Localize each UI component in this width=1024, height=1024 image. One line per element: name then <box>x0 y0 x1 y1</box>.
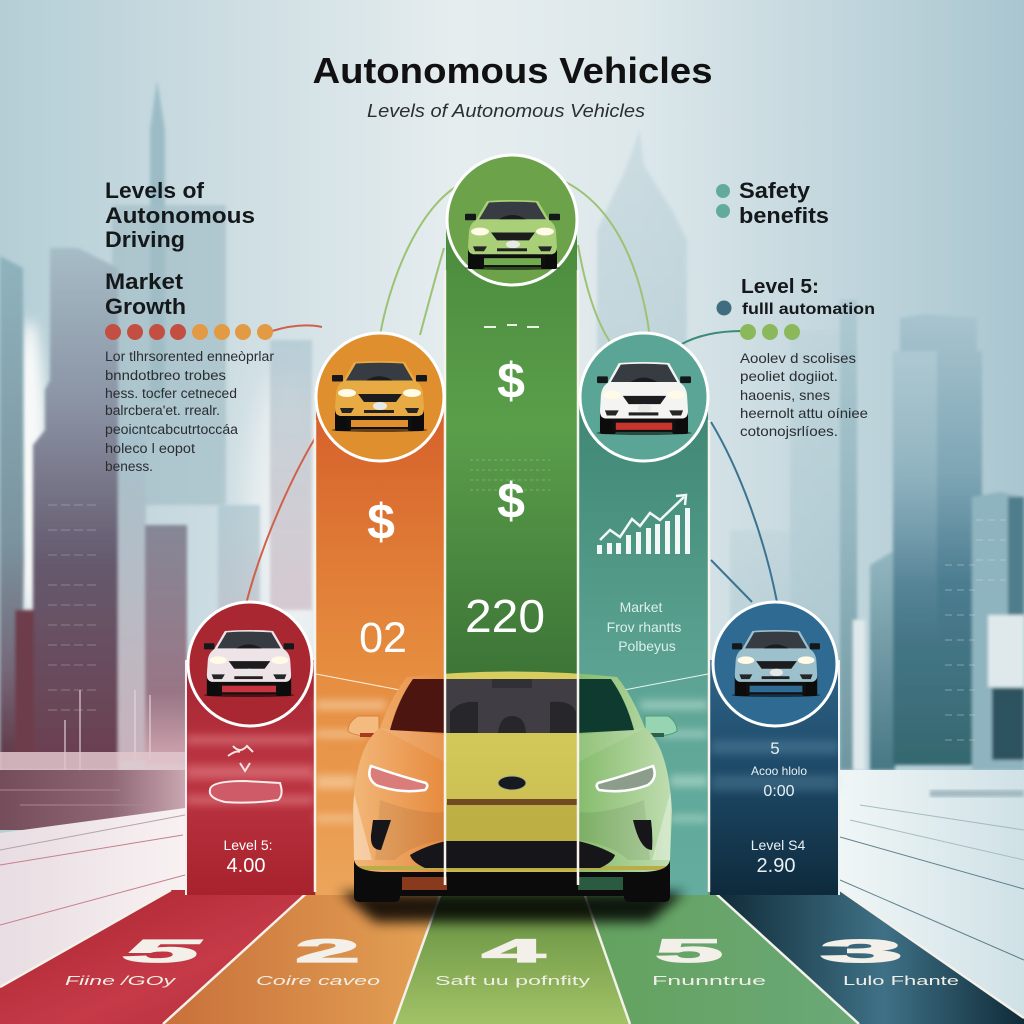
right paragraph <box>740 350 868 439</box>
floor labels: Lulo Fhante <box>843 973 959 988</box>
left paragraph: Lor tlhrsorented enneòprlar <box>105 349 275 364</box>
floor labels: Fnunntrue <box>652 973 766 988</box>
label: navy values: Acoo hlolo <box>751 764 807 778</box>
car mirrors <box>348 716 677 737</box>
left progress dots <box>105 324 273 340</box>
left paragraph <box>105 349 275 474</box>
lane: teal green <box>583 890 859 1024</box>
car headlights <box>369 766 655 791</box>
car ground shadow <box>340 892 685 922</box>
title: Autonomous Vehicles <box>312 50 712 91</box>
car grille and fog lamps <box>371 820 652 868</box>
label: navy values <box>751 739 807 877</box>
car body <box>353 672 672 872</box>
left paragraph: beness. <box>105 459 153 474</box>
left heading block <box>105 178 255 319</box>
right skyline <box>597 130 1024 770</box>
right paragraph: Aoolev d scolises <box>740 350 856 366</box>
building windows <box>48 505 100 710</box>
floor numbers: 5 <box>655 933 723 969</box>
left paragraph: holeco l eopot <box>105 441 195 456</box>
label: level 5 value: Level 5: <box>223 837 273 853</box>
building windows right <box>945 520 1006 740</box>
central car <box>340 660 685 922</box>
icon: dollar bottom: $ <box>497 473 525 529</box>
safety benefits: benefits <box>739 203 829 228</box>
floor labels: Fiine /GOy <box>65 973 178 988</box>
left heading block: Autonomous <box>105 203 255 228</box>
value: 220: 220 <box>465 590 545 642</box>
label: market: Market <box>620 599 662 615</box>
chart: rising bars with arrow <box>597 495 690 554</box>
lane: green <box>394 890 630 1024</box>
subtitle: Levels of Autonomous Vehicles <box>367 101 645 121</box>
label: level 5 value <box>223 837 273 877</box>
safety benefits <box>716 178 829 228</box>
lane: orange <box>163 890 442 1024</box>
floor numbers: 5 <box>124 933 204 969</box>
connector curves <box>245 178 777 608</box>
floor lanes <box>0 890 1024 1024</box>
street posts <box>65 690 150 770</box>
circle: green car top <box>447 155 577 285</box>
floor right <box>840 770 1024 1024</box>
car hood band and logo <box>447 776 577 805</box>
floor numbers: 2 <box>295 933 360 969</box>
value: 02: 02 <box>359 614 407 662</box>
column: orange <box>316 400 445 895</box>
lane: navy <box>712 890 1024 1024</box>
car underbody plate <box>402 877 623 890</box>
right paragraph: haoenis, snes <box>740 387 830 403</box>
label: navy values: 5 <box>770 739 780 758</box>
circle: navy car <box>713 602 837 726</box>
label: navy values: 2.90 <box>757 855 795 877</box>
level 5 block <box>716 276 875 340</box>
car windshield <box>390 679 634 733</box>
left paragraph: peoicntcabcutrtoccáa <box>105 422 239 437</box>
left heading block: Market <box>105 269 184 294</box>
lane: red <box>0 890 310 1024</box>
label: navy values: 0:00 <box>763 783 795 800</box>
floor numbers <box>124 933 903 969</box>
right paragraph: cotonojsrlíoes. <box>740 423 838 439</box>
label: navy values: Level S4 <box>751 837 805 853</box>
left heading block: Levels of <box>105 178 205 203</box>
safety benefits: Safety <box>739 178 811 203</box>
column: navy <box>710 660 840 895</box>
column dividers <box>315 270 709 892</box>
floor numbers: 4 <box>482 933 546 969</box>
icon: dollar: $ <box>367 494 395 550</box>
column: green <box>446 220 577 680</box>
left heading block: Driving <box>105 227 185 252</box>
left paragraph: hess. tocfer cetneced <box>105 386 237 401</box>
circle: red car <box>188 602 312 726</box>
right paragraph: peoliet dogiiot. <box>740 368 838 384</box>
floor numbers: 3 <box>820 933 903 969</box>
floor labels <box>65 973 959 988</box>
left heading block: Growth <box>105 294 186 319</box>
label: market: Frov rhantts <box>607 619 681 635</box>
icon: dollar top: $ <box>497 353 525 409</box>
icon: steering glyph and disc <box>210 746 282 803</box>
car wheels <box>354 850 670 902</box>
label: market: Polbeyus <box>618 638 676 654</box>
left paragraph: balrcbera'et. rrealr. <box>105 403 220 418</box>
circle: teal car <box>580 333 708 461</box>
floor left <box>0 808 185 1024</box>
column: teal <box>578 400 708 895</box>
left skyline <box>0 80 335 830</box>
label: market <box>607 599 681 654</box>
circle: orange car <box>316 333 444 461</box>
label: level 5 value: 4.00 <box>227 855 265 877</box>
floor labels: Coire caveo <box>256 973 380 988</box>
column: red <box>185 660 315 895</box>
right paragraph: heernolt attu oíniee <box>740 405 868 421</box>
left paragraph: bnndotbreo trobes <box>105 368 226 383</box>
level 5 block: fulll automation <box>742 301 875 318</box>
floor labels: Saft uu pofnfity <box>435 973 591 988</box>
level 5 block: Level 5: <box>741 276 819 298</box>
